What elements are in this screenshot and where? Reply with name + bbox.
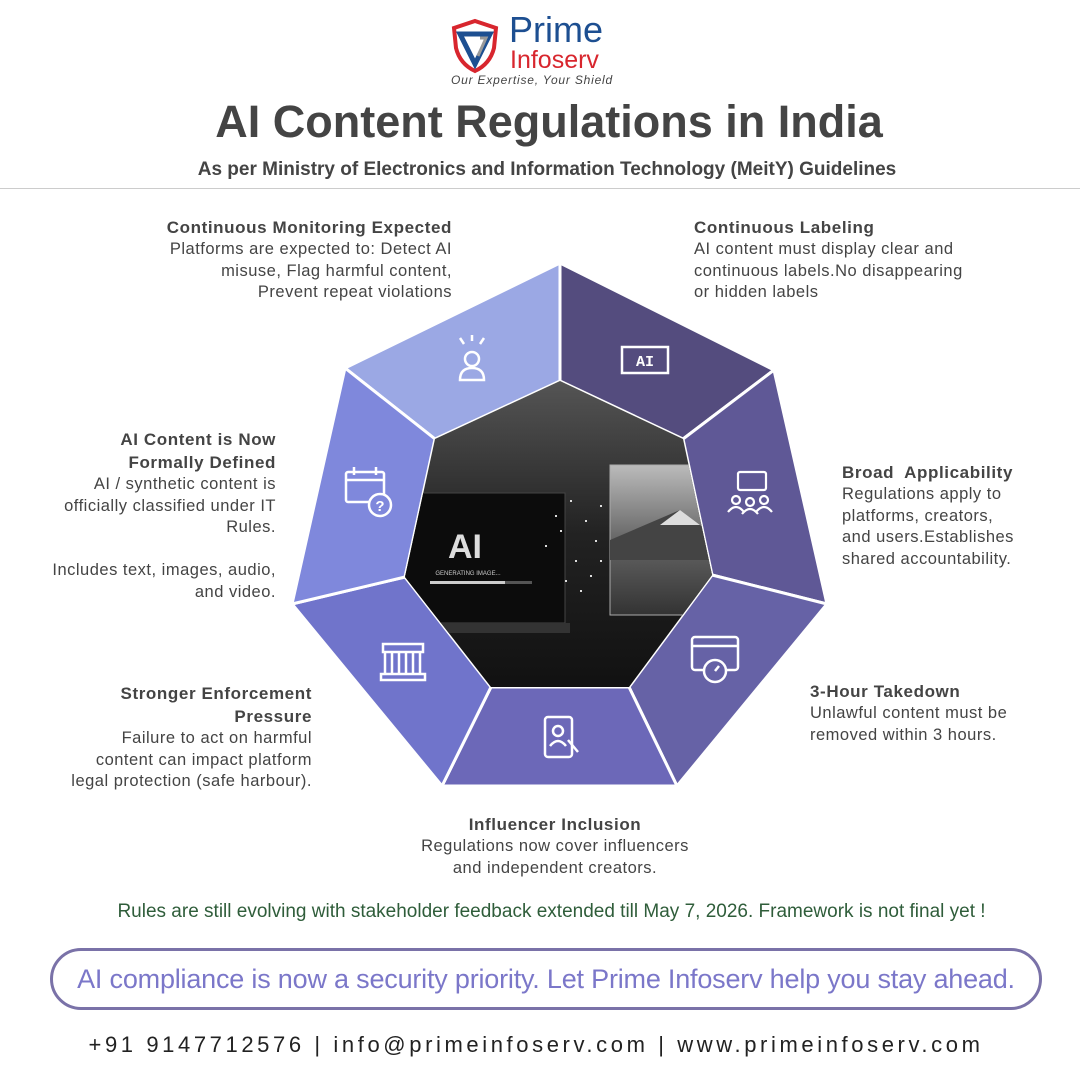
title: AI Content Regulations in India: [215, 96, 883, 147]
segment: monitoring: [345, 263, 560, 439]
segment: labeling: [560, 263, 774, 439]
heptagon diagram: [294, 266, 825, 784]
text: applicability: [842, 463, 1014, 568]
icon: phone selfie: [545, 717, 578, 757]
segment: takedown: [629, 575, 827, 786]
text: enforcement: [71, 684, 312, 790]
text: applicability: and users.Establishes: [842, 528, 1014, 546]
icon: people code: [728, 472, 772, 514]
icon: AI label: [622, 347, 668, 373]
text: takedown: 3-Hour Takedown: [810, 682, 960, 701]
text: labeling: continuous labels.No disappearing: [694, 262, 963, 280]
text: applicability: platforms, creators,: [842, 506, 993, 524]
icon: building: [381, 644, 425, 680]
segment: influencer: [442, 687, 677, 786]
logo: Infoserv: [510, 46, 599, 74]
text: defined: [52, 430, 276, 600]
text: labeling: Continuous Labeling: [694, 218, 874, 237]
text: influencer: [421, 815, 689, 876]
center image: GENERATING IMAGE...: [435, 571, 501, 577]
text: defined: Rules.: [226, 518, 276, 536]
text: enforcement: Failure to act on harmful: [122, 729, 312, 747]
center image: AI: [448, 528, 482, 566]
text: defined: AI / synthetic content is: [94, 475, 276, 493]
icon: AI label: AI: [636, 354, 654, 371]
icon: shield: [452, 18, 498, 74]
text: defined: Includes text, images, audio,: [52, 561, 276, 579]
logo: [451, 9, 613, 87]
callout pill: [50, 948, 1042, 1010]
note: Rules are still evolving with stakeholder feedback extended till May 7, 2026. Framework is not final yet !: [117, 901, 986, 922]
logo: Our Expertise, Your Shield: [451, 73, 613, 87]
text: monitoring: Continuous Monitoring Expected: [167, 218, 452, 237]
text: monitoring: Platforms are expected to: Detect AI: [170, 240, 452, 258]
text: applicability: Broad Applicability: [842, 463, 1013, 482]
icon: monitoring person: [460, 335, 484, 380]
text: takedown: Unlawful content must be: [810, 704, 1007, 722]
subtitle: As per Ministry of Electronics and Information Technology (MeitY) Guidelines: [198, 159, 896, 180]
text: enforcement: content can impact platform: [96, 750, 312, 768]
segment: defined: [292, 368, 435, 604]
text: applicability: Regulations apply to: [842, 485, 1002, 503]
text: defined: and video.: [195, 582, 276, 600]
icon: calendar question: [346, 467, 391, 516]
callout pill: AI compliance is now a security priority. Let Prime Infoserv help you stay ahead.: [77, 964, 1015, 994]
text: enforcement: Pressure: [234, 707, 312, 726]
text: defined: Formally Defined: [128, 453, 276, 472]
icon: calendar question: ?: [375, 498, 385, 515]
text: labeling: or hidden labels: [694, 283, 818, 301]
text: takedown: [810, 682, 1007, 744]
segment: enforcement: [292, 577, 491, 786]
text: influencer: and independent creators.: [453, 858, 657, 876]
text: defined: AI Content is Now: [120, 430, 276, 449]
text: enforcement: legal protection (safe harbour).: [71, 772, 312, 790]
text: labeling: AI content must display clear and: [694, 240, 954, 258]
text: enforcement: Stronger Enforcement: [121, 684, 312, 703]
text: influencer: Regulations now cover influencers: [421, 837, 689, 855]
segment: applicability: [683, 370, 827, 604]
text: takedown: removed within 3 hours.: [810, 726, 997, 744]
brand name: Prime: [509, 9, 603, 50]
text: applicability: shared accountability.: [842, 550, 1011, 568]
text: influencer: Influencer Inclusion: [469, 815, 641, 834]
center image: [400, 380, 720, 690]
text: monitoring: [167, 218, 452, 301]
footer contacts: +91 9147712576 | info@primeinfoserv.com | www.primeinfoserv.com: [88, 1032, 984, 1057]
text: monitoring: Prevent repeat violations: [258, 283, 452, 301]
text: monitoring: misuse, Flag harmful content,: [221, 262, 452, 280]
icon: stopwatch window: [692, 637, 738, 682]
text: defined: officially classified under IT: [64, 496, 276, 514]
text: labeling: [694, 218, 963, 301]
